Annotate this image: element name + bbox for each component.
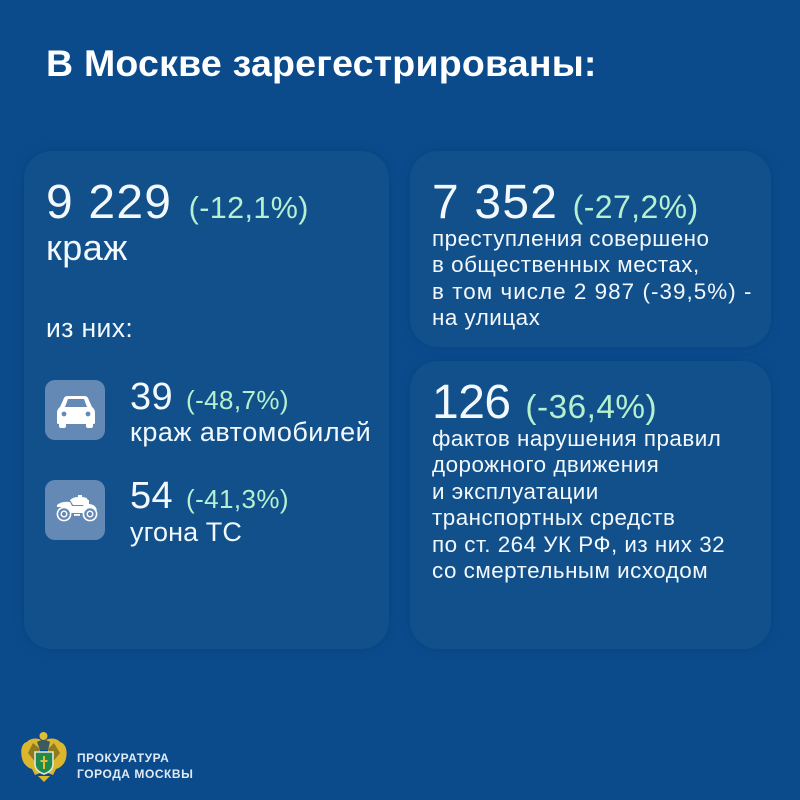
traffic violations text: и эксплуатации: [432, 479, 599, 504]
traffic violations text: со смертельным исходом: [432, 558, 708, 583]
of which label: из них:: [46, 313, 133, 343]
logo text: [77, 751, 193, 781]
panel: traffic violations: [410, 361, 771, 649]
car theft label: краж автомобилей: [130, 417, 371, 447]
public places text: [432, 226, 752, 330]
public places text: в том числе 2 987 (-39,5%) -: [432, 279, 752, 304]
public places text: на улицах: [432, 305, 540, 330]
logo text: ПРОКУРАТУРА: [77, 751, 169, 765]
traffic violations text: дорожного движения: [432, 452, 659, 477]
car theft figure: 39 (-48,7%): [130, 376, 289, 418]
traffic violations text: [432, 426, 725, 583]
traffic violations text: транспортных средств: [432, 505, 675, 530]
title: В Москве зарегестрированы:: [46, 42, 597, 84]
icon: motorcycle: [45, 480, 105, 540]
vehicle theft figure: 54 (-41,3%): [130, 475, 289, 517]
icon: emblem: [21, 732, 67, 782]
thefts total figure: 9 229 (-12,1%): [46, 176, 309, 229]
logo text: ГОРОДА МОСКВЫ: [77, 767, 193, 781]
panel: thefts: [24, 151, 389, 649]
panel: public places: [410, 151, 771, 347]
public places figure: 7 352 (-27,2%): [432, 176, 699, 229]
traffic violations text: фактов нарушения правил: [432, 426, 721, 451]
vehicle theft label: угона ТС: [130, 517, 242, 547]
icon: car: [45, 380, 105, 440]
public places text: в общественных местах,: [432, 252, 700, 277]
public places text: преступления совершено: [432, 226, 709, 251]
traffic violations text: по ст. 264 УК РФ, из них 32: [432, 532, 725, 557]
thefts label: краж: [46, 227, 128, 268]
traffic violations figure: 126 (-36,4%): [432, 376, 657, 429]
